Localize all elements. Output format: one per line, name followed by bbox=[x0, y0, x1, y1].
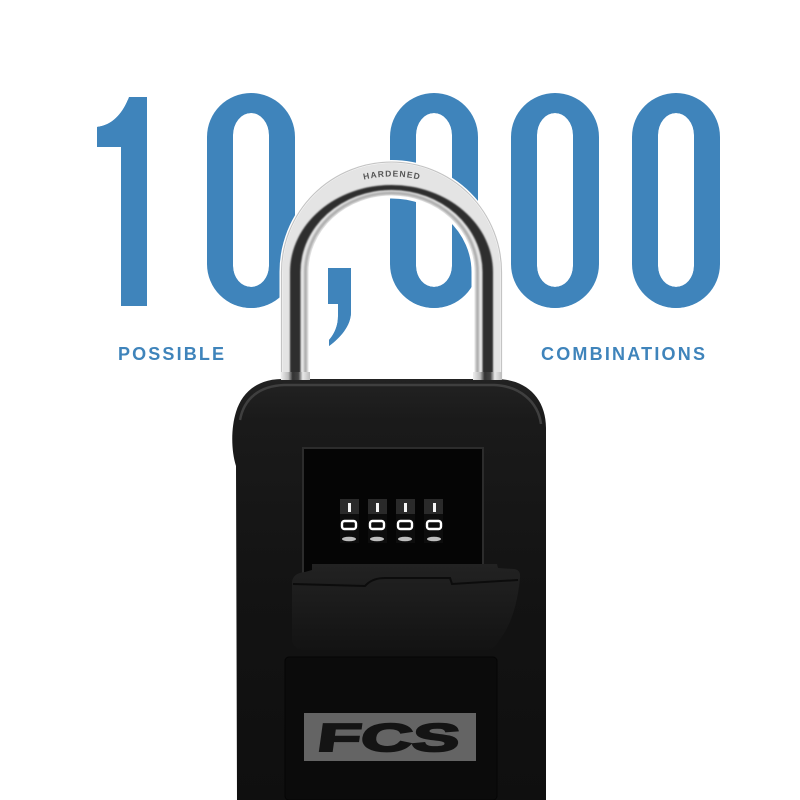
digit 0: 0 bbox=[498, 36, 612, 370]
logo badge bbox=[304, 713, 476, 761]
label: combinations: COMBINATIONS bbox=[541, 344, 705, 364]
digit 1: 1 bbox=[50, 36, 200, 370]
engraved hardened text: HARDENED bbox=[363, 170, 420, 180]
comma: , bbox=[277, 7, 403, 376]
digit 0: 0 bbox=[377, 36, 491, 370]
flap lid bbox=[292, 564, 520, 650]
combination window bbox=[303, 448, 483, 578]
infographic canvas bbox=[97, 93, 720, 800]
label: possible: POSSIBLE bbox=[118, 344, 224, 364]
combination dials bbox=[340, 499, 443, 543]
digit 0: 0 bbox=[194, 36, 308, 370]
lock body bbox=[232, 379, 546, 800]
shackle bbox=[280, 160, 502, 380]
logo text FCS: FCS bbox=[315, 717, 463, 760]
big number 10,000 bbox=[97, 93, 720, 346]
digit 0: 0 bbox=[619, 36, 733, 370]
shackle collars bbox=[281, 372, 502, 380]
lower panel bbox=[285, 657, 497, 800]
